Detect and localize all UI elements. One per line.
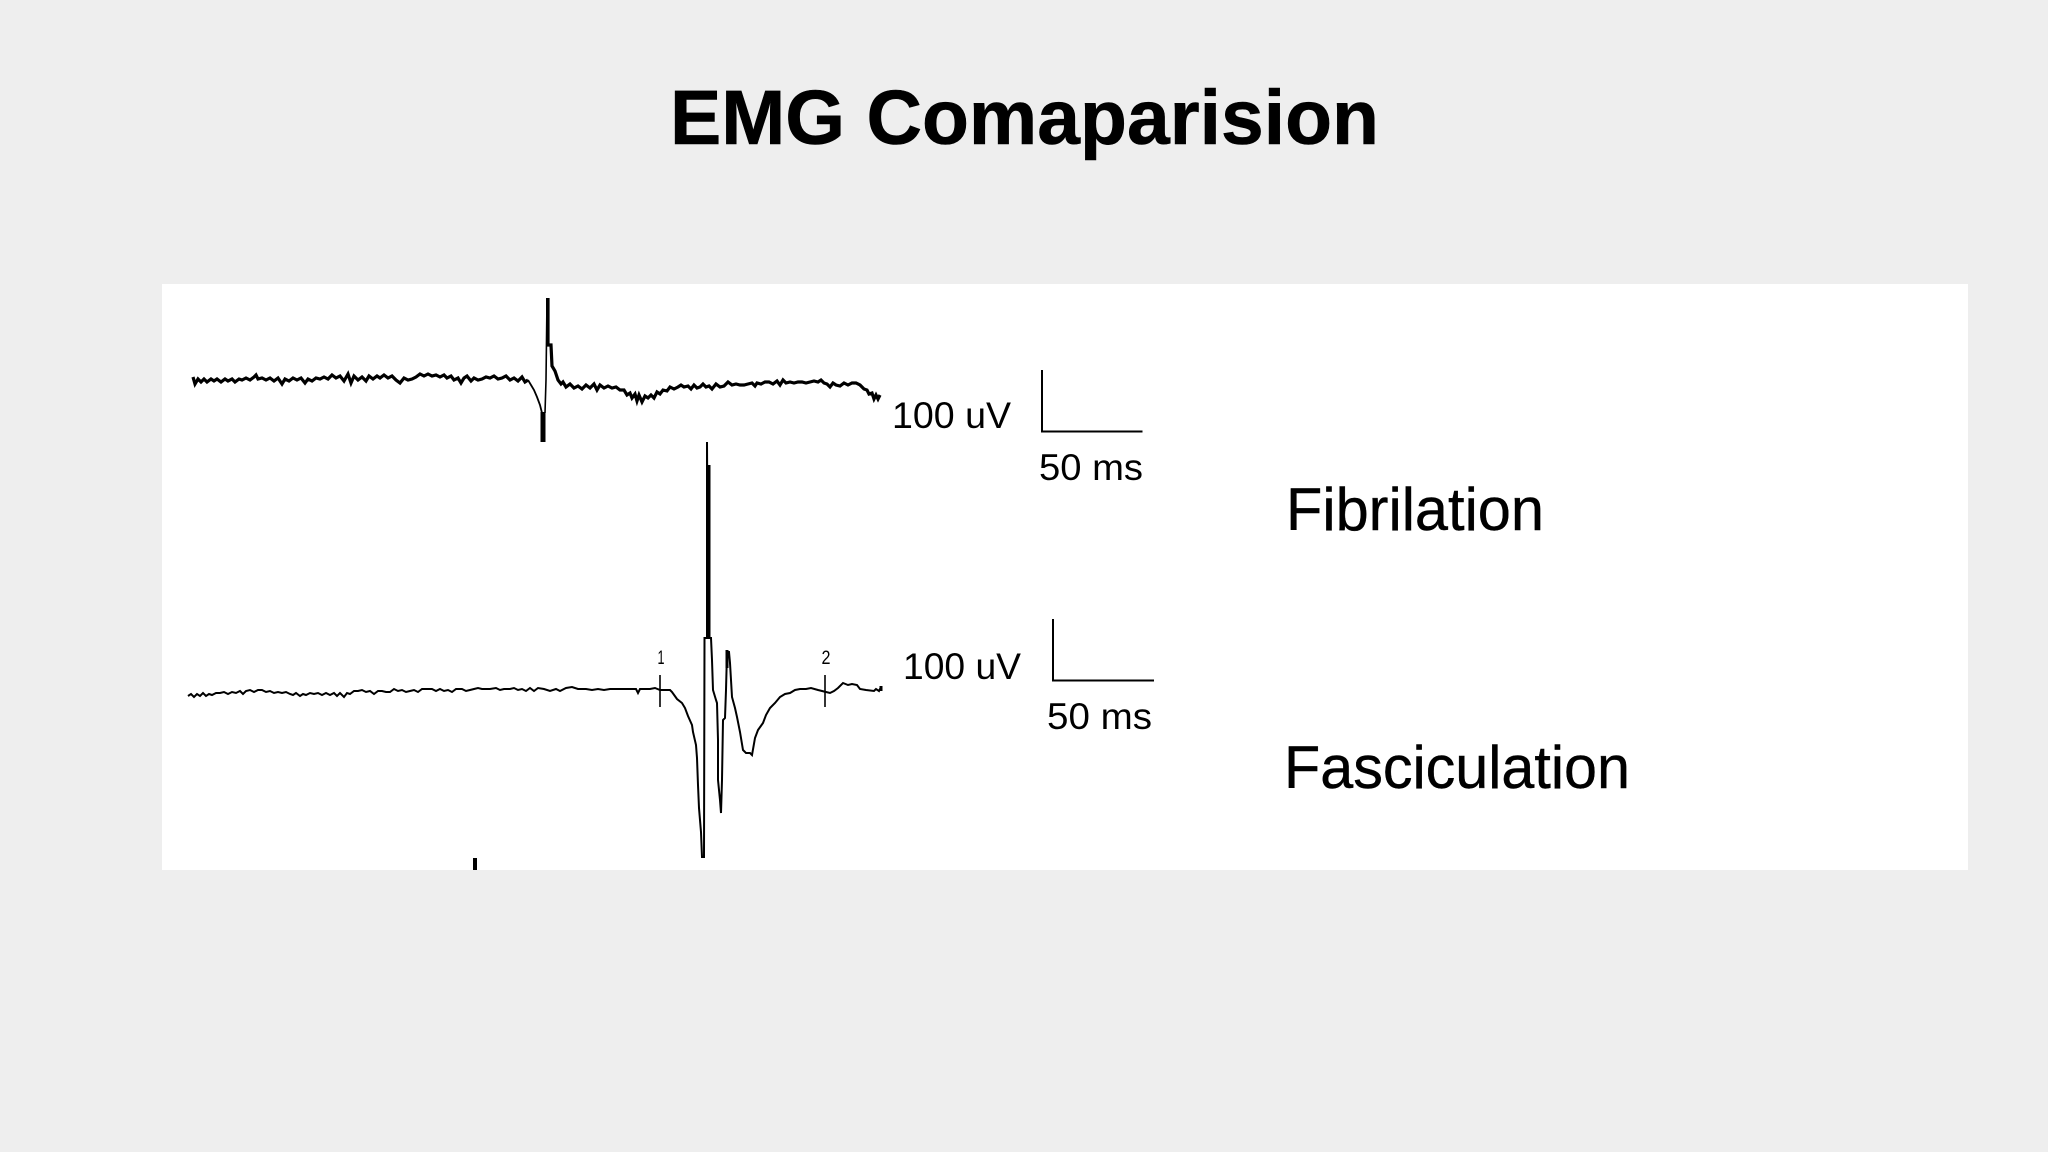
amplitude label: fasciculation: 100 uV <box>903 646 1021 687</box>
chart: fibrillation trace <box>193 298 880 442</box>
amplitude label: fibrillation: 100 uV <box>892 395 1011 436</box>
time label: fibrillation: 50 ms <box>1039 447 1143 488</box>
marker 1: 1 <box>658 648 664 669</box>
marker 1 <box>658 648 664 707</box>
marker 2 <box>822 648 830 707</box>
stray tick mark <box>473 858 477 870</box>
marker 2: 2 <box>822 648 830 669</box>
panel: EMG recordings <box>162 284 1968 870</box>
label: Fibrilation: Fibrilation <box>1286 476 1544 543</box>
label: Fasciculation: Fasciculation <box>1284 734 1630 801</box>
title: EMG Comaparision <box>670 75 1379 161</box>
time label: fasciculation: 50 ms <box>1047 696 1152 737</box>
scale bar: fasciculation <box>903 619 1154 737</box>
chart: fasciculation trace <box>188 442 881 857</box>
scale bar: fibrillation <box>892 370 1143 488</box>
